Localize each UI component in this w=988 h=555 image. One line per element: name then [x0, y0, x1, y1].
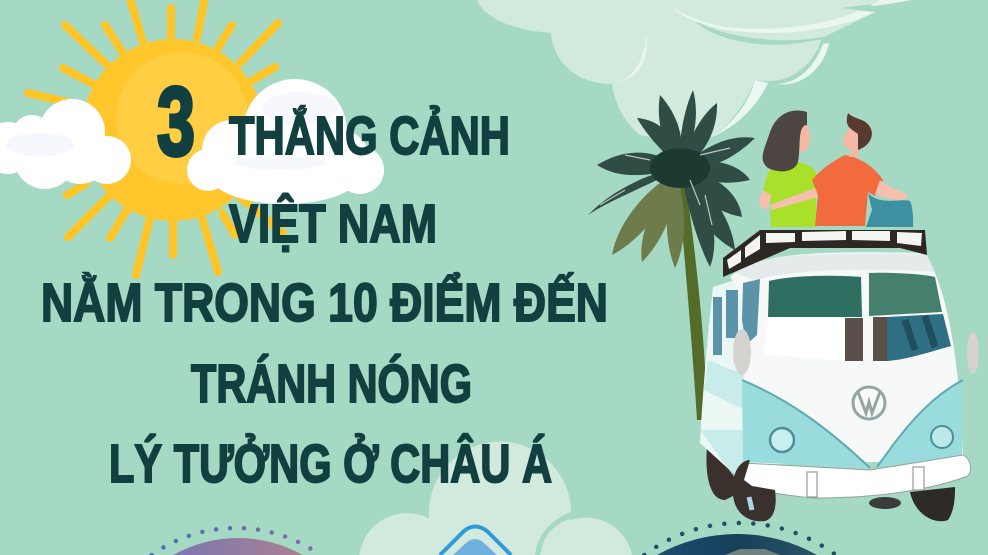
title line 1: THẮNG CẢNH	[229, 105, 510, 166]
front left wheel	[733, 460, 776, 521]
title	[41, 67, 608, 494]
left white cloud	[0, 99, 131, 189]
roof rack	[723, 230, 927, 277]
woman's shirt	[763, 162, 816, 227]
right white cloud	[187, 79, 384, 204]
VW logo	[853, 387, 885, 419]
palm fronds: olive lower	[612, 170, 684, 268]
van body	[730, 252, 963, 465]
title line 5: LÝ TƯỞNG Ở CHÂU Á	[109, 433, 552, 494]
right mirror	[967, 332, 979, 374]
left teal panel	[742, 380, 870, 468]
van side	[700, 280, 745, 475]
palm trunk	[677, 170, 707, 420]
decorative top cloud	[477, 0, 912, 140]
center wheel	[869, 497, 901, 509]
upper right window	[869, 273, 942, 316]
left headlight	[770, 428, 794, 452]
icon: sun	[28, 2, 283, 275]
upper left window	[768, 276, 862, 317]
lower windows	[764, 314, 951, 361]
man's shirt	[812, 155, 883, 226]
man's head	[843, 113, 872, 157]
title line 3: NẰM TRONG 10 ĐIỂM ĐẾN	[41, 273, 608, 333]
bottom center mountain icon	[440, 526, 511, 555]
camper van	[700, 230, 979, 521]
title line 2: VIỆT NAM	[229, 193, 437, 254]
title line 4: TRÁNH NÓNG	[191, 354, 472, 414]
palm fronds: highlights	[600, 148, 730, 225]
left photo	[173, 538, 303, 555]
palm fronds: dark	[588, 90, 755, 267]
side windows	[713, 279, 760, 355]
bottom right photo with dotted ring	[644, 523, 836, 555]
right headlight	[931, 426, 953, 448]
couple on van roof	[759, 111, 913, 227]
left mirror	[733, 329, 751, 375]
woman's head and hair	[763, 111, 810, 171]
right teal panel	[877, 380, 963, 467]
bumper	[743, 455, 971, 498]
rear wheel	[706, 447, 735, 500]
bottom left photo with dotted ring	[152, 528, 320, 555]
right photo	[657, 534, 817, 555]
palm tree	[588, 90, 755, 420]
left dotted ring	[152, 528, 320, 555]
right dotted ring	[644, 523, 836, 555]
decorative bottom cloud	[359, 442, 632, 555]
arms	[759, 180, 908, 210]
man's legs	[866, 193, 913, 227]
right wheel	[910, 487, 955, 521]
title number: 3	[157, 67, 195, 176]
